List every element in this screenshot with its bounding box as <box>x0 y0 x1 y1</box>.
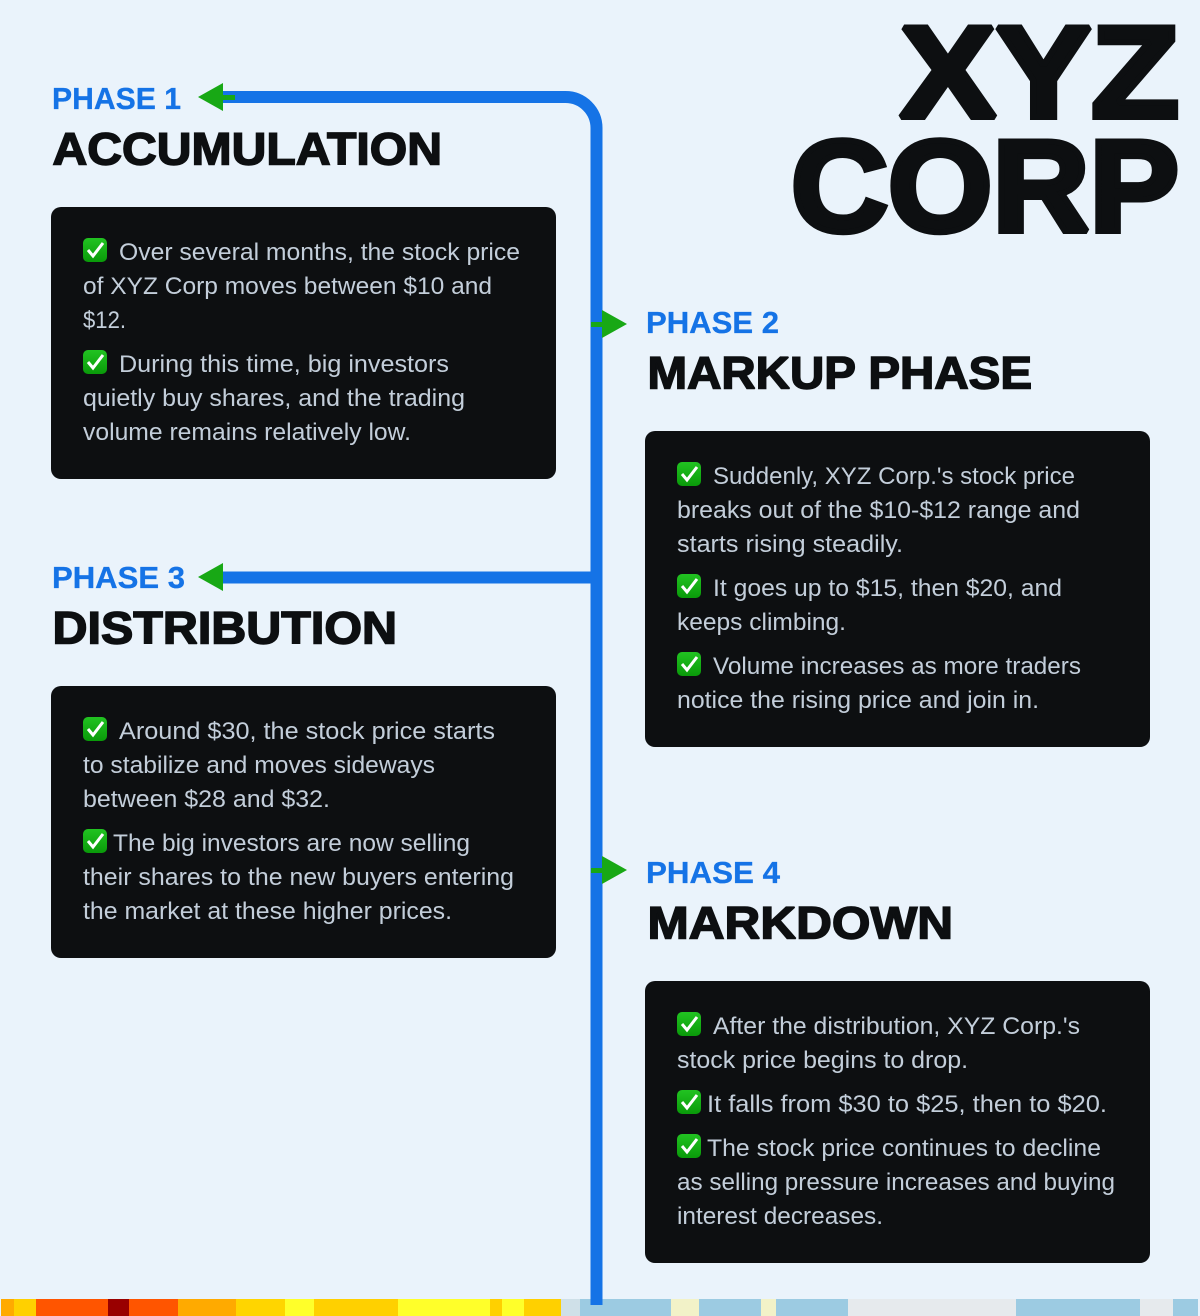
arrow: phase 1 <box>198 83 235 111</box>
phase 2 card: It goes up to $15, then $20, and <box>713 575 1062 602</box>
arrow: phase 4 <box>591 856 627 884</box>
arrow: phase 2 <box>591 310 627 338</box>
phase 4 card: as selling pressure increases and buying <box>677 1169 1115 1196</box>
phase 3 card: their shares to the new buyers entering <box>83 864 514 891</box>
phase 3 card: The big investors are now selling <box>113 830 470 857</box>
phase 2 card: starts rising steadily. <box>677 531 903 558</box>
icon: check <box>83 829 107 853</box>
phase 4 card <box>645 981 1150 1263</box>
phase 2 card <box>645 431 1150 747</box>
phase 2 card: Volume increases as more traders <box>713 653 1081 680</box>
phase 3 card: to stabilize and moves sideways <box>83 752 435 779</box>
phase 2 heading: MARKUP PHASE <box>648 348 1032 398</box>
phase 3 label: PHASE 3 <box>52 560 185 595</box>
phase 4 label: PHASE 4 <box>646 855 781 890</box>
title <box>791 0 1179 259</box>
phase 1 card: quietly buy shares, and the trading <box>83 385 465 412</box>
timeline connector <box>223 97 596 1305</box>
phase 3 card: the market at these higher prices. <box>83 898 452 925</box>
title: XYZ <box>900 0 1179 145</box>
phase 2 card: Suddenly, XYZ Corp.'s stock price <box>713 463 1075 490</box>
bottom heat strip <box>1 1299 1198 1316</box>
icon: check <box>677 1012 701 1036</box>
panel: phase 2 markup <box>645 305 1150 747</box>
icon: check <box>83 238 107 262</box>
phase 4 card: It falls from $30 to $25, then to $20. <box>707 1091 1107 1118</box>
icon: check <box>677 574 701 598</box>
phase 1 card: volume remains relatively low. <box>83 419 411 446</box>
phase 1 heading: ACCUMULATION <box>52 124 442 174</box>
panel: phase 4 markdown <box>645 855 1150 1263</box>
phase 2 card: breaks out of the $10-$12 range and <box>677 497 1080 524</box>
icon: check <box>677 462 701 486</box>
phase 1 card: $12. <box>83 307 126 334</box>
phase 2 card: keeps climbing. <box>677 609 846 636</box>
panel: phase 1 accumulation <box>51 81 556 479</box>
phase 1 card: During this time, big investors <box>119 351 449 378</box>
phase 3 card: Around $30, the stock price starts <box>119 718 495 745</box>
title: CORP <box>791 113 1179 259</box>
phase 3 card: between $28 and $32. <box>83 786 330 813</box>
phase 4 heading: MARKDOWN <box>648 898 953 948</box>
phase 2 card: notice the rising price and join in. <box>677 687 1039 714</box>
icon: check <box>677 652 701 676</box>
icon: check <box>677 1090 701 1114</box>
phase 3 card <box>51 686 556 958</box>
icon: check <box>83 350 107 374</box>
phase 1 card: of XYZ Corp moves between $10 and <box>83 273 492 300</box>
phase 1 label: PHASE 1 <box>52 81 181 116</box>
phase 4 card: After the distribution, XYZ Corp.'s <box>713 1013 1080 1040</box>
phase 4 card: The stock price continues to decline <box>707 1135 1101 1162</box>
phase 4 card: interest decreases. <box>677 1203 883 1230</box>
arrow: phase 3 <box>198 563 223 591</box>
phase 1 card <box>51 207 556 479</box>
icon: check <box>677 1134 701 1158</box>
panel: phase 3 distribution <box>51 560 556 958</box>
icon: check <box>83 717 107 741</box>
phase 4 card: stock price begins to drop. <box>677 1047 968 1074</box>
phase 1 card: Over several months, the stock price <box>119 239 520 266</box>
phase 2 label: PHASE 2 <box>646 305 779 340</box>
phase 3 heading: DISTRIBUTION <box>52 602 397 654</box>
